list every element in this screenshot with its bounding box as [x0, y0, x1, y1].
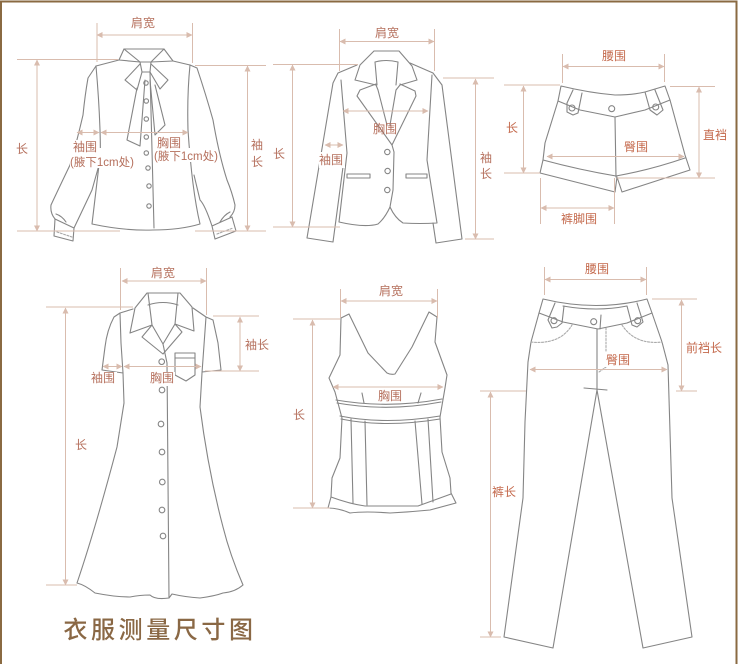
- dress drawing: [77, 293, 243, 599]
- label: sleeve length: 长: [251, 155, 263, 169]
- label: chest: 胸围: [373, 121, 397, 136]
- label: sleeve girth: 袖围: [73, 139, 97, 154]
- panel: blouse: [16, 15, 266, 241]
- label: shoulder width: 肩宽: [375, 25, 399, 40]
- label: hip: 臀围: [624, 140, 648, 154]
- blouse drawing: [51, 49, 236, 241]
- label: chest: 胸围: [150, 370, 174, 385]
- label: sleeve length: 袖长: [245, 337, 269, 352]
- label: length: 长: [16, 142, 28, 156]
- panel: trousers: [480, 262, 722, 648]
- panel: jacket: [273, 25, 494, 243]
- panel: shorts: [504, 49, 727, 226]
- label: shoulder width: 肩宽: [379, 283, 403, 298]
- title: 衣服测量尺寸图: [63, 617, 257, 644]
- label: length: 长: [75, 438, 87, 452]
- label: length: 长: [293, 408, 305, 422]
- label: shoulder width: 肩宽: [151, 265, 175, 280]
- note: chest position: (腋下1cm处): [154, 149, 218, 163]
- label: hip: 臀围: [606, 353, 630, 367]
- label: sleeve girth: 袖围: [91, 370, 115, 385]
- label: front rise: 前裆长: [686, 340, 722, 355]
- jacket drawing: [307, 51, 462, 243]
- label: trouser length: 裤长: [492, 485, 516, 499]
- trousers drawing: [504, 299, 692, 648]
- label: length: 长: [506, 121, 518, 135]
- label: chest: 胸围: [157, 135, 181, 150]
- label: length: 长: [273, 147, 285, 161]
- label: chest: 胸围: [378, 388, 402, 403]
- label: waist: 腰围: [602, 49, 626, 63]
- label: leg opening: 裤脚围: [561, 211, 597, 226]
- label: waist: 腰围: [585, 262, 609, 276]
- label: sleeve girth: 袖围: [319, 152, 343, 167]
- panel: dress: [46, 265, 269, 599]
- panel: tank top: [293, 283, 456, 513]
- label: shoulder width: 肩宽: [131, 15, 155, 30]
- label: sleeve length: 袖: [480, 150, 492, 165]
- label: rise: 直裆: [703, 128, 727, 142]
- shorts drawing: [540, 86, 690, 192]
- label: sleeve length: 长: [480, 167, 492, 181]
- label: sleeve length: 袖: [251, 137, 263, 152]
- tank top drawing: [328, 312, 456, 513]
- note: sleeve girth position: (腋下1cm处): [70, 155, 134, 169]
